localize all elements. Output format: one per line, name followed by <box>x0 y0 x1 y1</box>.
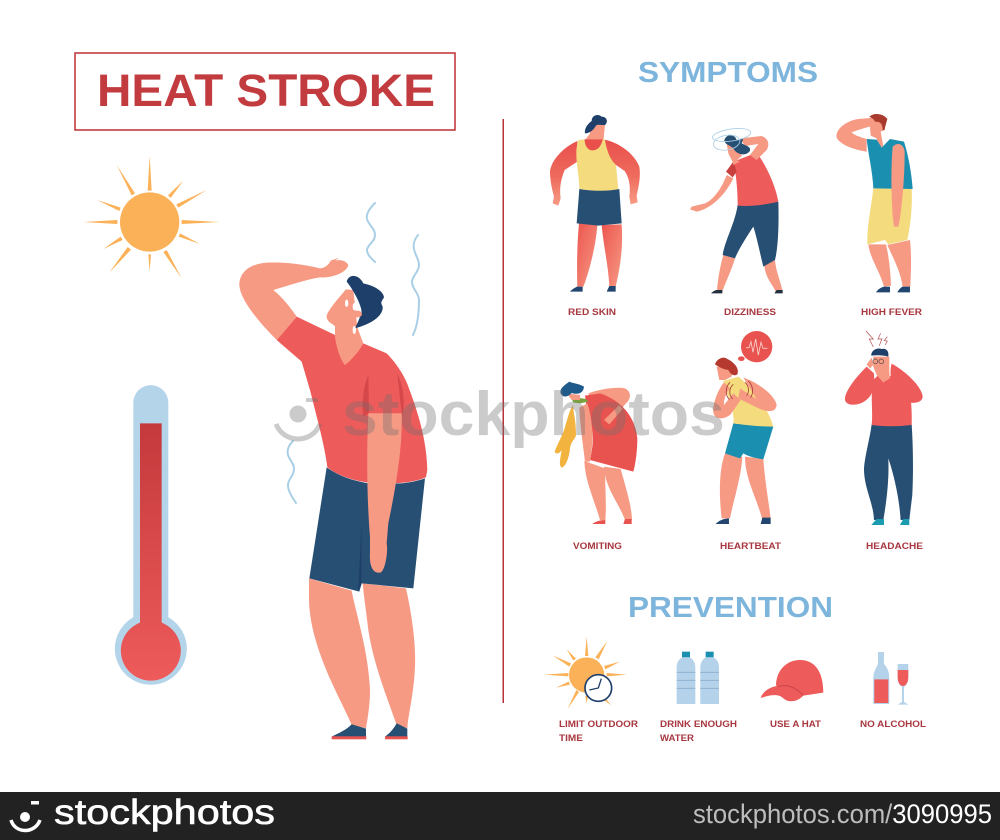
label: USE A HAT <box>770 719 821 730</box>
prevention: use a hat <box>761 660 823 730</box>
main figure: man with heat stroke <box>239 258 427 739</box>
hair <box>347 276 384 328</box>
footer logo: stockphotos <box>54 793 275 832</box>
symptom: vomiting <box>555 382 637 552</box>
label: HIGH FEVER <box>861 307 922 318</box>
prevention: drink enough water <box>660 652 737 744</box>
label: HEARTBEAT <box>720 541 781 552</box>
prevention: limit outdoor time <box>544 637 638 744</box>
label: HEADACHE <box>866 541 923 552</box>
label: NO ALCOHOL <box>860 719 926 730</box>
sweat drops <box>345 300 356 334</box>
prevention: drink enough water: WATER <box>660 733 694 744</box>
footer url: stockphotos.com/3090995 <box>693 799 992 829</box>
neck and face <box>327 289 363 365</box>
label: DIZZINESS <box>724 307 776 318</box>
near arm <box>367 413 402 573</box>
icon: thermometer <box>115 385 187 685</box>
label: VOMITING <box>573 541 622 552</box>
title: HEAT STROKE <box>97 65 435 116</box>
footer bar <box>0 792 1000 840</box>
shoes <box>332 723 408 739</box>
heat waves <box>288 203 419 503</box>
shorts <box>309 467 425 592</box>
shirt <box>277 317 427 483</box>
symptom: heartbeat <box>713 331 781 552</box>
title <box>75 53 455 130</box>
label: DRINK ENOUGH <box>660 719 737 730</box>
symptom: headache <box>845 331 923 552</box>
legs <box>309 578 415 728</box>
raised arm <box>239 258 348 340</box>
sleeve folds <box>363 375 369 417</box>
label: RED SKIN <box>568 307 616 318</box>
symptom: high fever <box>836 114 922 318</box>
prevention: limit outdoor time: TIME <box>559 733 583 744</box>
symptom: dizziness <box>690 126 783 318</box>
symptom: red skin <box>550 115 640 318</box>
heading: symptoms: SYMPTOMS <box>638 57 818 89</box>
watermark: stockphotos <box>342 380 725 449</box>
prevention: no alcohol <box>860 652 926 730</box>
icon: sun <box>83 156 219 278</box>
label: LIMIT OUTDOOR <box>559 719 638 730</box>
ear <box>353 311 362 317</box>
divider <box>502 119 504 703</box>
heading: prevention: PREVENTION <box>628 592 833 624</box>
